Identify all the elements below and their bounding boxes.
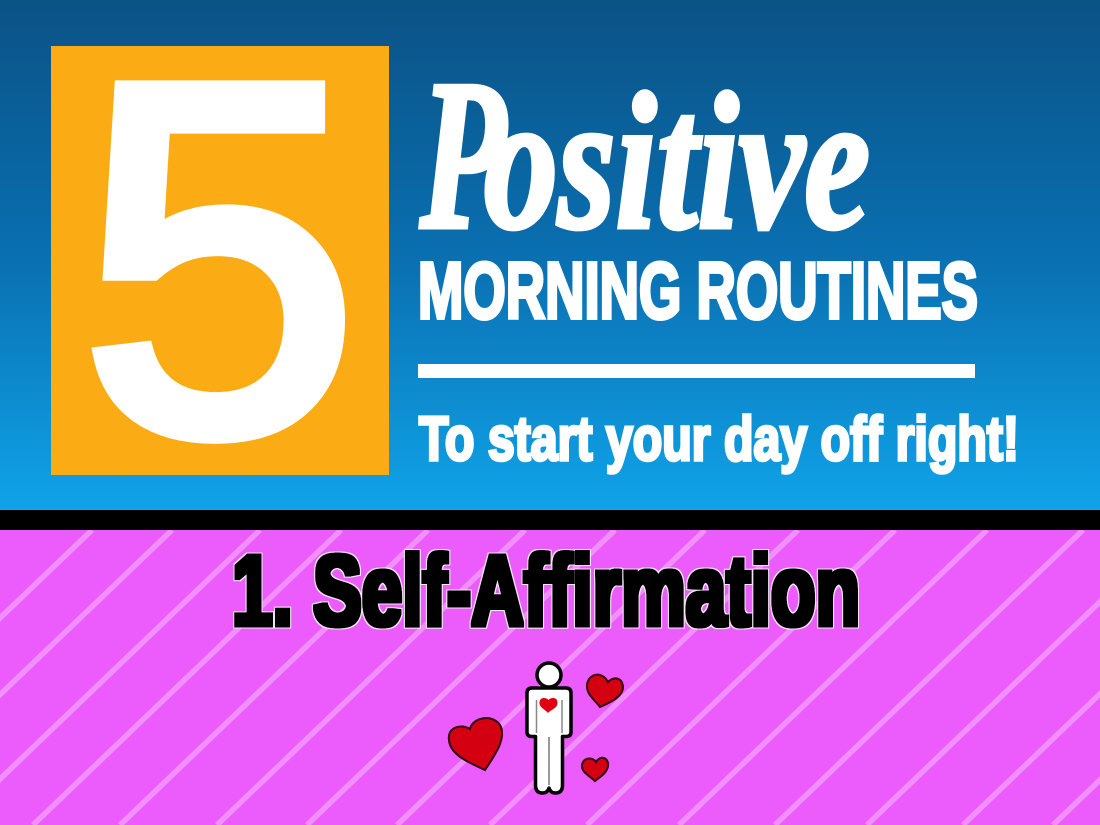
title: Positive: ositive: [484, 54, 870, 270]
panel: header background: [0, 0, 1100, 510]
heading: 1. Self-Affirmation: 1. Self-Affirmation: [232, 535, 860, 647]
icon: large heart: [449, 718, 502, 770]
icon: person with hearts: [449, 663, 623, 793]
icon: lower right heart: [582, 758, 608, 781]
panel: self-affirmation background: [0, 530, 1100, 825]
orange number block: [51, 46, 389, 475]
icon: person: [527, 663, 571, 793]
icon: upper right heart: [587, 675, 623, 707]
divider bar: [418, 364, 975, 378]
black separator band: [0, 510, 1100, 530]
title: Positive: P: [419, 35, 507, 274]
icon: chest heart: [539, 698, 558, 713]
